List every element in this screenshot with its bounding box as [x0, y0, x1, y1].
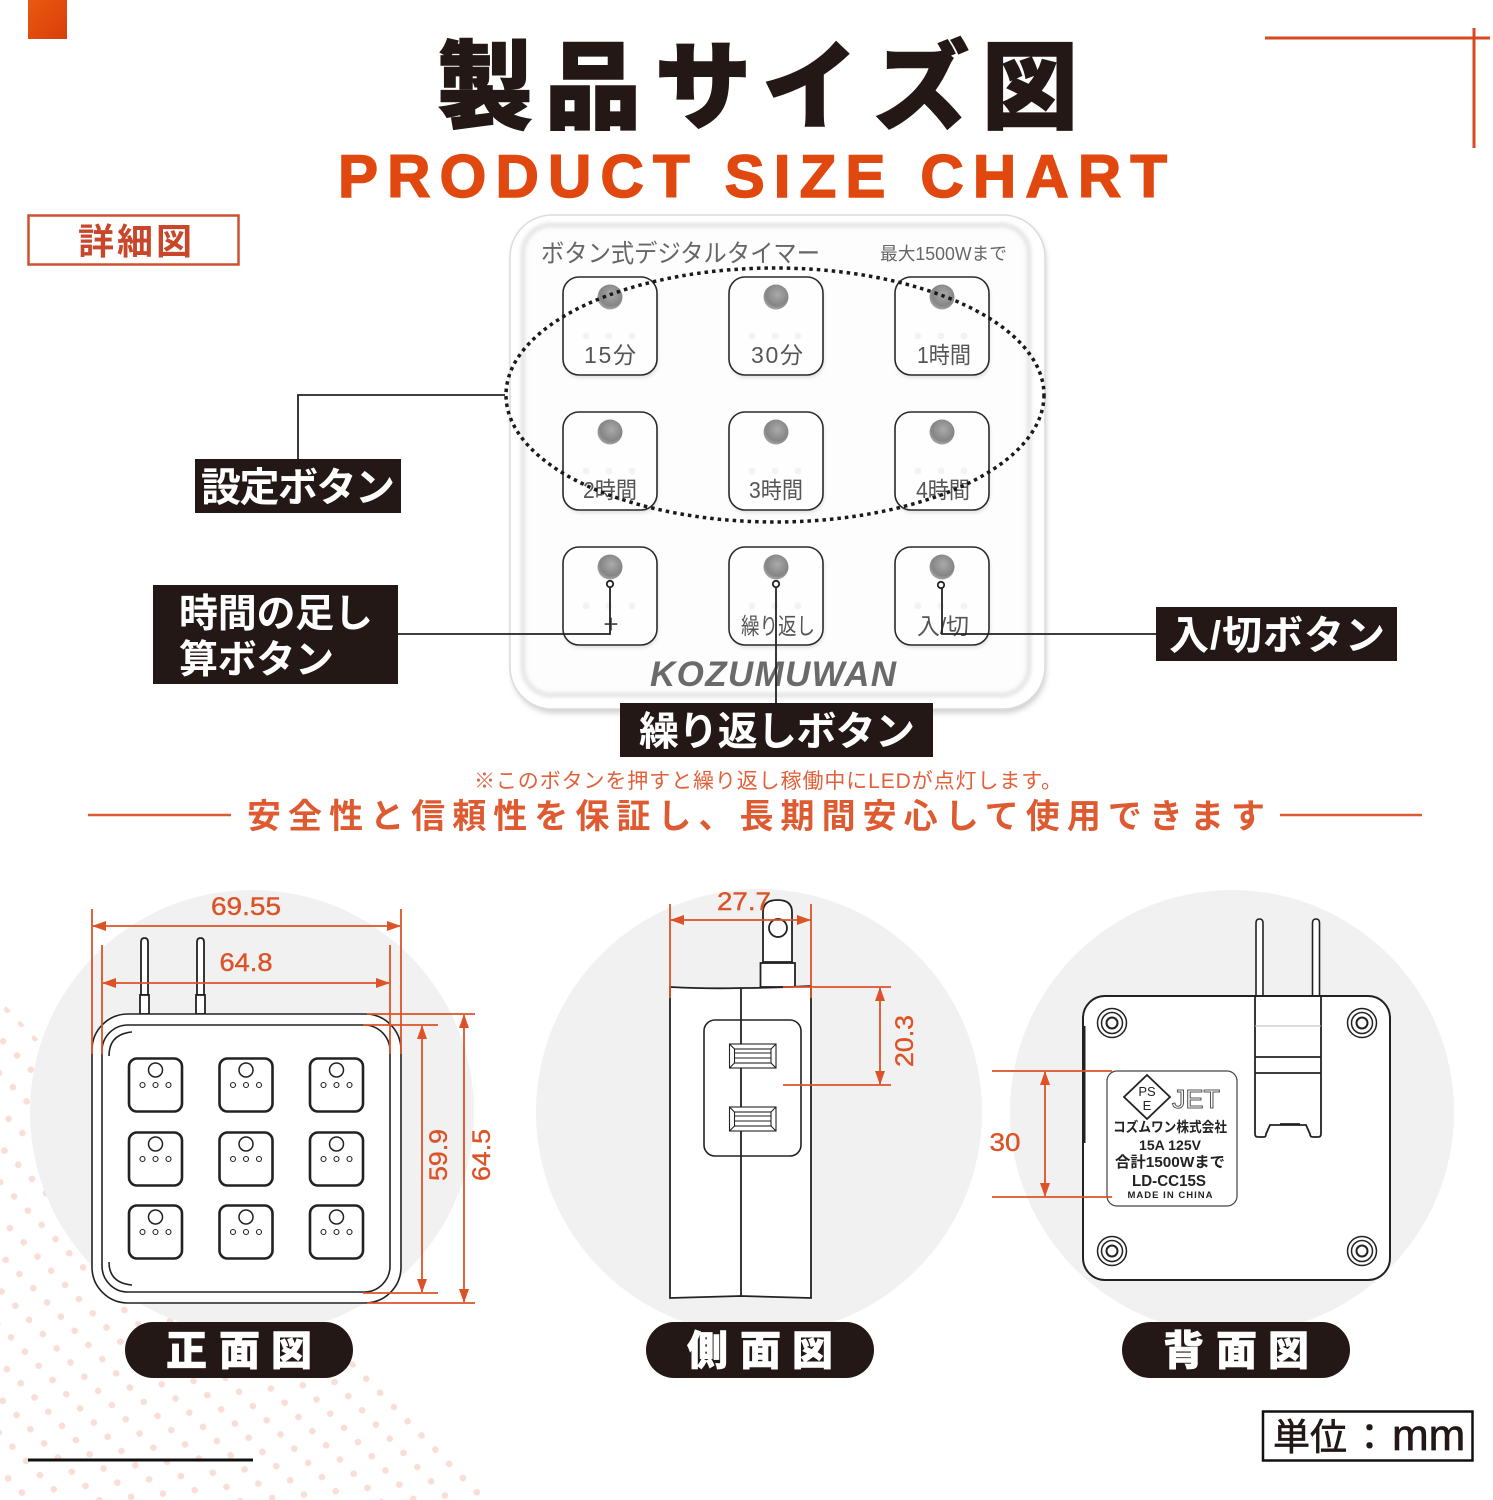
button labels: 4時間 — [916, 477, 970, 503]
leader line: on/off button — [938, 582, 1156, 634]
label pill: back view — [1122, 1322, 1350, 1378]
button labels: + — [603, 609, 619, 639]
side view plug — [760, 900, 795, 987]
corner accent lines — [1265, 28, 1490, 148]
unit box: mm — [1392, 1411, 1465, 1460]
safety heading with rules: 安全性と信頼性を保証し、長期間安心して使用できます — [247, 798, 1265, 836]
callout: setting button: 設定ボタン — [201, 466, 395, 510]
label pill: front view: 正面図 — [166, 1328, 312, 1374]
dotted ellipse around setting buttons — [506, 268, 1044, 522]
device heading: ボタン式デジタルタイマー — [541, 240, 820, 268]
device wattage note: 最大1500Wまで — [880, 244, 1007, 264]
dimension: height 59.9: 59.9 — [425, 1129, 453, 1181]
bottom rule — [28, 1458, 253, 1462]
dimension: height 64.5: 64.5 — [468, 1129, 496, 1181]
back view screws — [1098, 1008, 1376, 1266]
leader line: setting button — [298, 395, 505, 459]
background dot pattern — [0, 1000, 492, 1500]
dimension: depth 27.7 — [670, 888, 811, 998]
dimension: height 64.5 — [367, 1014, 496, 1303]
callout: on/off button: 入/切ボタン — [1169, 614, 1385, 658]
PSE mark: PS — [1138, 1084, 1156, 1099]
front view body outline — [92, 1014, 401, 1303]
device body — [510, 215, 1046, 713]
panel: back view drawing — [990, 919, 1390, 1280]
leader line: add-time button — [398, 581, 613, 634]
dimension: 30: 30 — [990, 1129, 1020, 1157]
callout: add-time button: 時間の足し — [179, 593, 373, 636]
back view plug clip — [1255, 996, 1321, 1137]
unit box — [1263, 1411, 1472, 1460]
title: 製品サイズ図 — [437, 35, 1078, 142]
background circles — [30, 889, 1454, 1335]
rating label — [1107, 1071, 1237, 1206]
button labels: 2時間 — [583, 477, 637, 503]
front view plug prongs — [140, 938, 205, 1014]
label text: MADE IN CHINA — [1128, 1190, 1213, 1201]
label text: 合計1500Wまで — [1115, 1154, 1225, 1171]
callout: add-time button: 算ボタン — [179, 639, 334, 682]
panel: front view drawing — [92, 893, 496, 1303]
button labels: 1時間 — [917, 342, 971, 368]
unit box: 単位 — [1273, 1417, 1347, 1458]
callout: repeat button: 繰り返しボタン — [639, 710, 915, 754]
label text: LD-CC15S — [1132, 1173, 1206, 1190]
button labels — [583, 342, 971, 639]
back view body — [1083, 996, 1390, 1280]
PSE mark: E — [1143, 1098, 1152, 1113]
dimension: 30 — [990, 1071, 1112, 1197]
label pill: back view: 背面図 — [1163, 1328, 1309, 1374]
label text — [1113, 1119, 1227, 1201]
PSE mark — [1124, 1075, 1170, 1119]
back view side edge — [1082, 1026, 1086, 1143]
leader line: repeat button — [773, 581, 779, 703]
label text: コズムワン株式会社 — [1113, 1119, 1227, 1135]
corner accent square — [28, 0, 67, 39]
side view center seam — [740, 988, 742, 1296]
device buttons — [563, 277, 990, 648]
label pill: side view — [646, 1322, 874, 1378]
side view socket plate — [704, 1020, 801, 1156]
dimension: height 59.9 — [363, 1025, 453, 1293]
panel: device front photo — [510, 215, 1046, 713]
dimension: width 69.55: 69.55 — [211, 893, 281, 921]
socket slots — [730, 1044, 776, 1131]
side view body — [670, 986, 811, 1298]
back view plug prongs — [1256, 919, 1320, 996]
front view buttons — [129, 1058, 363, 1258]
note: ※このボタンを押すと繰り返し稼働中にLEDが点灯します。 — [474, 770, 1062, 793]
dimension: depth 27.7: 27.7 — [717, 888, 771, 916]
subtitle: PRODUCT SIZE CHART — [338, 143, 1167, 210]
dimension: width 64.8 — [102, 945, 390, 1054]
section tag: detail view — [28, 216, 238, 264]
callout: add-time button — [153, 585, 398, 684]
label pill: front view — [125, 1322, 353, 1378]
dimension: width 69.55 — [92, 893, 401, 1054]
button labels: 繰り返し — [741, 613, 815, 639]
label pill: side view: 側面図 — [687, 1328, 833, 1374]
unit box: ： — [1351, 1417, 1388, 1458]
brand name: KOZUMUWAN — [650, 655, 897, 694]
button labels: 3時間 — [749, 477, 803, 503]
panel: side view drawing — [670, 888, 919, 1298]
button labels: 入/切 — [917, 613, 969, 639]
dimension: 20.3: 20.3 — [891, 1015, 919, 1067]
JET mark: JET — [1172, 1084, 1220, 1114]
section tag: detail view: 詳細図 — [78, 221, 192, 262]
dimension: 20.3 — [783, 987, 919, 1085]
button labels: 15分 — [584, 342, 636, 368]
dimension: width 64.8: 64.8 — [220, 949, 272, 977]
label text: 15A 125V — [1139, 1137, 1202, 1153]
button labels: 30分 — [751, 342, 803, 368]
